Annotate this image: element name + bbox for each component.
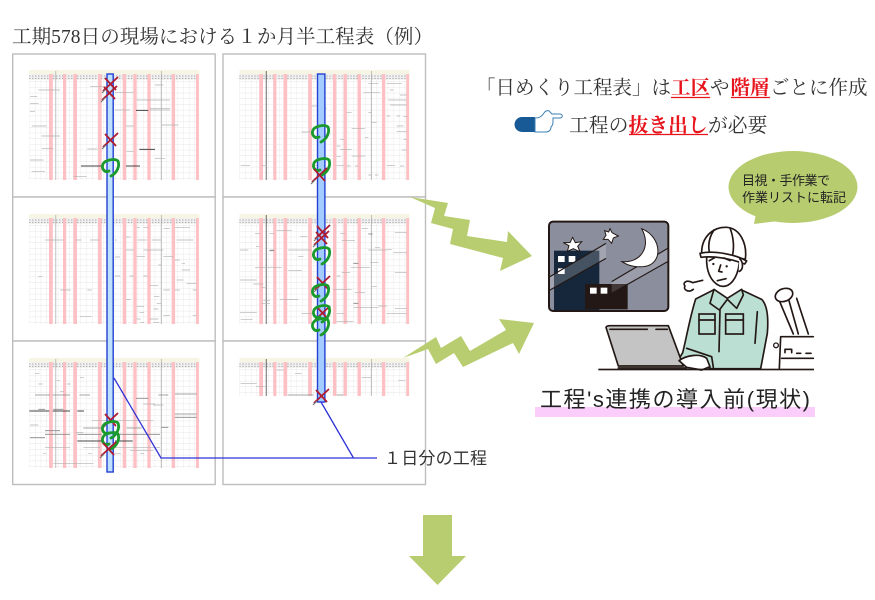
text block: daily schedule note: 階層 xyxy=(730,77,770,99)
sheet frame: right bottom xyxy=(223,341,426,484)
callout text line 2: 作業リストに転記 xyxy=(742,190,846,205)
gantt bars: left top xyxy=(30,85,178,177)
text block: daily schedule note: ごとに作成 xyxy=(770,77,868,99)
marks: left bottom xyxy=(100,413,119,458)
title: 工期578日の現場における１か月半工程表（例） xyxy=(12,26,433,48)
arrow: zigzag from lower sheets xyxy=(403,319,534,367)
text block: daily schedule note: 工区 xyxy=(671,77,710,99)
gantt bars: right top xyxy=(241,83,407,175)
sheet frame: left bottom xyxy=(13,341,215,484)
panel: daily schedule sheets, left column xyxy=(13,54,215,484)
laptop xyxy=(606,326,710,370)
one-day column: left xyxy=(107,74,113,472)
text block: daily schedule note: や xyxy=(710,78,730,99)
night window xyxy=(549,222,668,311)
chart: left middle xyxy=(29,214,199,324)
worker head and helmet xyxy=(700,227,747,286)
sheet frame: left middle xyxy=(13,197,215,341)
text block: daily schedule note: 「日めくり工程表」は xyxy=(476,77,671,99)
one-day column: right xyxy=(318,74,325,402)
dark date lines: right column xyxy=(265,71,267,396)
caption highlight xyxy=(535,407,815,417)
callout text line 1: 目視・手作業で xyxy=(742,173,830,188)
gantt bars: right middle xyxy=(240,228,407,322)
underline: key terms xyxy=(629,98,770,134)
panel: daily schedule sheets, right column xyxy=(223,54,426,484)
sheet frame: left top xyxy=(13,54,215,197)
gantt bars: left middle xyxy=(38,227,197,322)
sheet frame: right top xyxy=(223,54,426,197)
desk line xyxy=(598,369,814,370)
arrow: zigzag from upper sheets xyxy=(410,197,532,271)
marks: right top xyxy=(311,126,330,184)
text block: extraction needed: 工程の xyxy=(569,115,628,137)
marks: right middle xyxy=(312,225,330,335)
gantt bars: left bottom xyxy=(29,373,197,463)
marks: left top xyxy=(101,77,119,176)
sheet frame: right middle xyxy=(223,197,426,341)
worker body xyxy=(678,289,768,369)
label: one day of schedule: １日分の工程 xyxy=(384,449,487,468)
chart: right bottom, short xyxy=(240,358,410,396)
callout: speech bubble xyxy=(728,151,858,224)
chart: right middle xyxy=(240,214,410,324)
caption: before introduction: 工程's連携の導入前(現状) xyxy=(540,387,810,412)
chart: right top xyxy=(240,70,410,180)
icon: pointing hand xyxy=(515,111,562,132)
text block: extraction needed: が必要 xyxy=(708,115,768,137)
arrow: down xyxy=(409,515,466,585)
breath puff xyxy=(684,280,703,291)
text block: extraction needed: 抜き出し xyxy=(628,115,708,137)
marks: right bottom xyxy=(313,389,329,405)
gantt bars: right bottom xyxy=(241,370,405,395)
chart: left top xyxy=(29,70,199,180)
chart: left bottom xyxy=(29,358,199,468)
leader lines to one-day label xyxy=(114,378,377,458)
rolled drawings and desk items xyxy=(773,286,813,368)
illustration: night window and worker xyxy=(549,222,814,370)
